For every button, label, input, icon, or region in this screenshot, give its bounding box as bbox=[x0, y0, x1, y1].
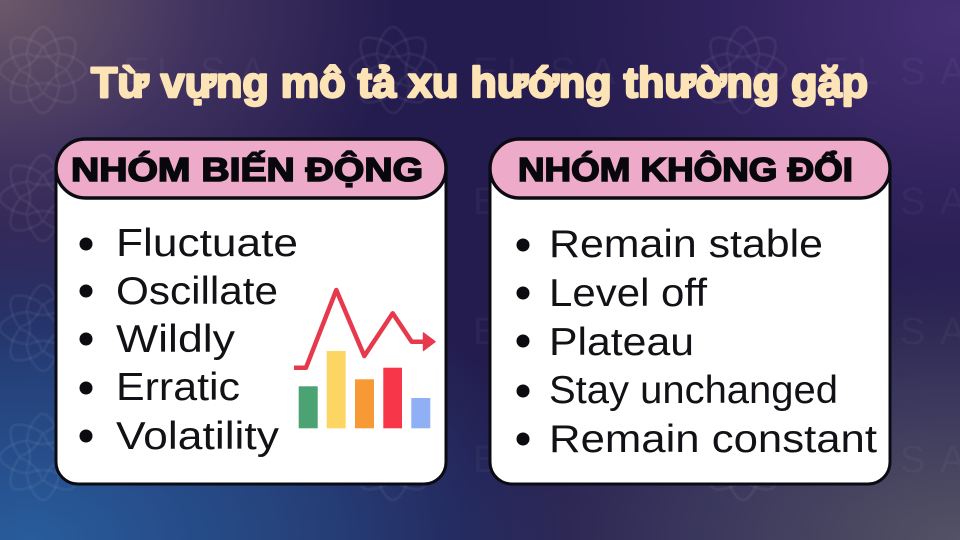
word list: Erratic bbox=[116, 366, 240, 409]
word list: Wildly bbox=[116, 318, 236, 361]
card body bbox=[490, 150, 890, 484]
word list bbox=[516, 223, 877, 461]
word list: Volatility bbox=[116, 415, 280, 458]
heading text: NHÓM KHÔNG ĐỔI bbox=[518, 150, 853, 188]
word list: Remain constant bbox=[549, 418, 877, 461]
icon: bar chart with fluctuating arrow bbox=[294, 290, 435, 428]
panel: nhóm không đổi bbox=[490, 139, 890, 484]
heading pill bbox=[56, 139, 446, 198]
heading pill bbox=[490, 139, 890, 198]
word list: Stay unchanged bbox=[549, 369, 838, 412]
title: Từ vựng mô tả xu hướng thường gặp bbox=[91, 59, 868, 107]
word list: Level off bbox=[549, 272, 707, 315]
word list: Plateau bbox=[549, 321, 694, 364]
word list: Oscillate bbox=[116, 270, 278, 313]
card body bbox=[56, 150, 446, 484]
word list: Fluctuate bbox=[116, 222, 298, 265]
word list bbox=[80, 222, 298, 458]
panel: nhóm biến động bbox=[56, 139, 446, 484]
word list: Remain stable bbox=[549, 223, 823, 266]
heading text: NHÓM BIẾN ĐỘNG bbox=[71, 150, 423, 188]
